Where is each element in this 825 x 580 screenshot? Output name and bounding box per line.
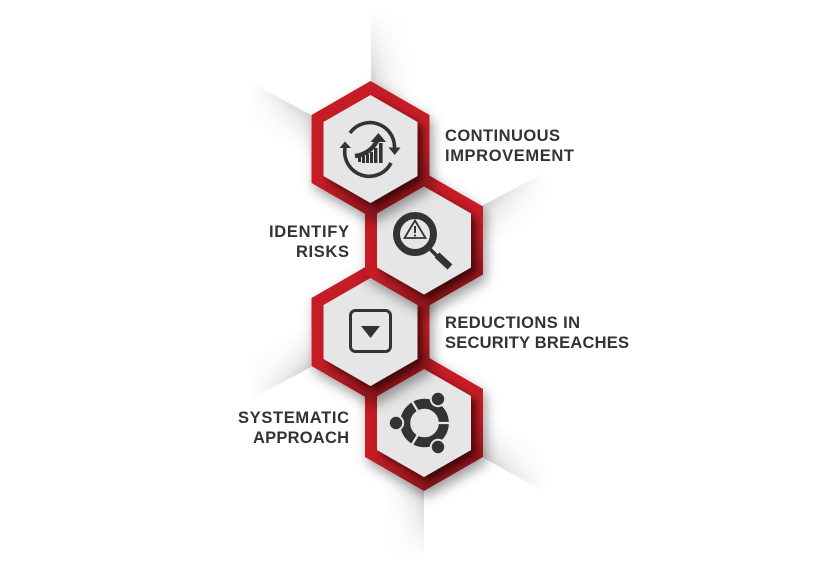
label: reductions in security breaches xyxy=(445,314,629,352)
label: continuous improvement: IMPROVEMENT xyxy=(445,147,574,165)
label: continuous improvement: CONTINUOUS xyxy=(445,127,560,145)
label: identify risks xyxy=(269,223,349,261)
icon: magnifier with warning triangle xyxy=(396,216,450,267)
label: reductions in security breaches: SECURITY BREACHES xyxy=(445,334,629,352)
label: reductions in security breaches: REDUCTIONS IN xyxy=(445,314,580,332)
icon: ubuntu-style circle of friends xyxy=(389,392,452,454)
label: identify risks: IDENTIFY xyxy=(269,223,349,241)
label: systematic approach xyxy=(238,409,349,447)
icon: cycle arrows with rising chart xyxy=(340,123,400,176)
label: identify risks: RISKS xyxy=(296,243,349,261)
icon: square with down triangle xyxy=(350,310,390,352)
hexagon 1: continuous improvement xyxy=(312,81,430,217)
hexagon 3: reductions in security breaches xyxy=(312,264,430,400)
label: continuous improvement xyxy=(445,127,574,165)
label: systematic approach: APPROACH xyxy=(253,429,349,447)
long shadows behind hexagons xyxy=(262,26,533,546)
label: systematic approach: SYSTEMATIC xyxy=(238,409,349,427)
hexagon 4: systematic approach xyxy=(365,355,483,491)
hexagon 2: identify risks xyxy=(365,172,483,308)
